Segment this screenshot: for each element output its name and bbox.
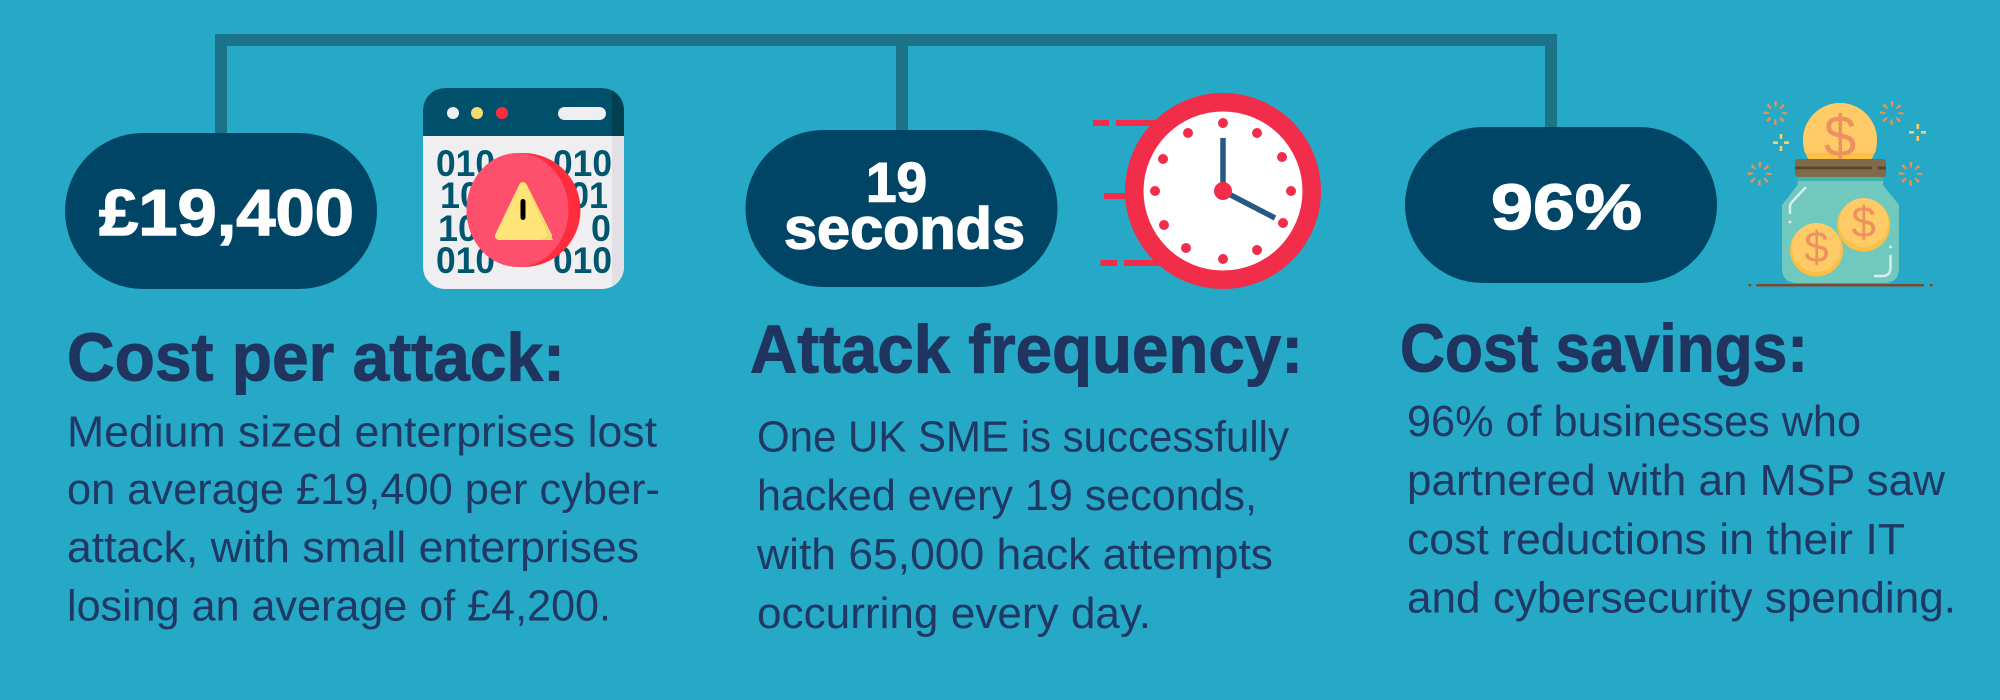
body text: cost savings [1407, 397, 1956, 623]
body text: attack frequency: hacked every 19 seconds, [757, 471, 1257, 520]
icon: binary code browser window with warning: 010 [553, 240, 612, 281]
icon: binary code browser window with warning: 0 [591, 208, 611, 249]
body text: cost savings: and cybersecurity spending. [1407, 574, 1956, 623]
icon: binary code browser window with warning: 010 [436, 240, 495, 281]
stat pill: 19 seconds: seconds [784, 197, 1025, 262]
heading: attack frequency: Attack frequency: [750, 312, 1303, 388]
body text: cost per attack: on average £19,400 per cyber- [67, 465, 660, 514]
body text: cost per attack [67, 408, 660, 630]
body text: attack frequency: One UK SME is successfully [757, 413, 1289, 462]
stat pill: £19,400: £19,400 [99, 176, 354, 249]
panel: cost savings [1400, 103, 1956, 623]
icon: clock with speed lines [1093, 93, 1321, 289]
body text: cost savings: 96% of businesses who [1407, 397, 1861, 446]
icon: binary code browser window with warning: 10 [440, 175, 480, 216]
panel: cost per attack [65, 88, 660, 630]
icon: jar of coins: $ [1824, 104, 1856, 169]
body text: attack frequency [756, 413, 1289, 638]
panel: attack frequency [746, 93, 1321, 638]
body text: cost per attack: attack, with small enterprises [67, 523, 639, 572]
stat pill: £19,400 [65, 133, 377, 289]
body text: attack frequency: with 65,000 hack attempts [756, 530, 1273, 579]
stat pill: 19 seconds: 19 [866, 151, 927, 214]
icon: jar of coins: $ [1804, 223, 1829, 272]
icon: binary code browser window with warning: 10 [438, 208, 478, 249]
connector lines linking the three stats [215, 34, 1557, 134]
body text: attack frequency: occurring every day. [757, 589, 1151, 638]
icon: jar of coins: $ [1851, 198, 1876, 247]
stat pill: 96%: 96% [1491, 171, 1642, 243]
stat pill: 96% [1405, 127, 1717, 283]
heading: cost savings: Cost savings: [1400, 311, 1808, 387]
icon: binary code browser window with warning: 01 [570, 175, 608, 216]
icon: jar of coins [1748, 103, 1932, 286]
body text: cost savings: partnered with an MSP saw [1407, 456, 1945, 505]
stat pill: 19 seconds [746, 130, 1058, 287]
body text: cost savings: cost reductions in their IT [1407, 515, 1905, 564]
icon: binary code browser window with warning: 010 [436, 143, 495, 184]
icon: binary code browser window with warning: 010 [553, 143, 612, 184]
icon: binary code browser window with warning [423, 88, 624, 289]
body text: cost per attack: Medium sized enterprises lost [67, 408, 657, 457]
body text: cost per attack: losing an average of £4,200. [67, 582, 611, 630]
heading: cost per attack: Cost per attack: [67, 320, 565, 396]
